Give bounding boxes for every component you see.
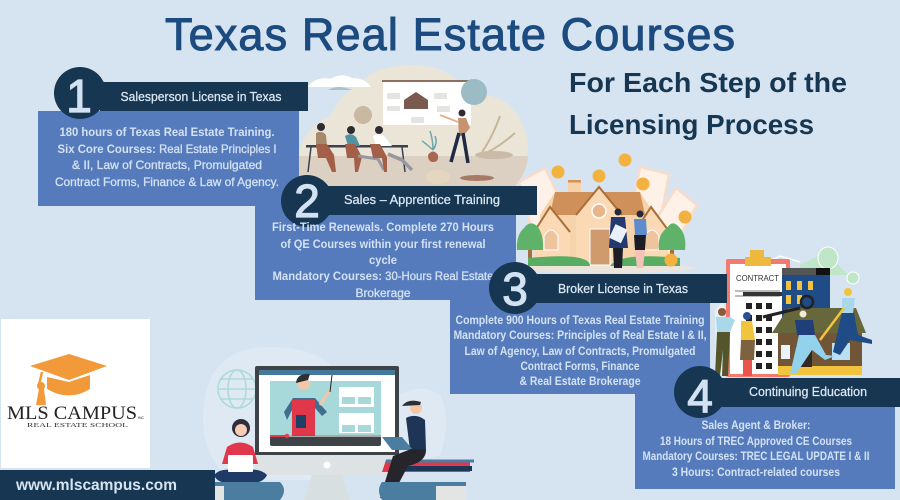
- panel 4 number badge: [674, 366, 726, 422]
- logo: MLS Campus: MLS CAMPUS: [7, 403, 137, 424]
- panel 1 text: & II, Law of Contracts, Promulgated: [72, 158, 262, 172]
- panel 3 text: Mandatory Courses: Principles of Real Estate I & II,: [454, 328, 706, 342]
- logo: MLS Campus: [1, 319, 150, 468]
- title: Texas Real Estate Courses: [165, 9, 735, 60]
- illustration: contract, keys and house: CONTRACT: [736, 273, 779, 283]
- website footer bar: www.mlscampus.com: [15, 477, 177, 494]
- panel 4: continuing education: [635, 366, 900, 489]
- subtitle: [569, 67, 847, 140]
- panel 3 header bar: [515, 274, 727, 303]
- panel 2 number badge: [281, 175, 333, 227]
- icon: graduation cap: [30, 354, 107, 405]
- panel 4 body: [635, 394, 895, 489]
- panel 4 text: 3 Hours: Contract-related courses: [672, 465, 840, 479]
- subtitle: For Each Step of the: [569, 67, 847, 98]
- panel 1 number badge: [54, 67, 106, 122]
- panel 2 text: Mandatory Courses: 30-Hours Real Estate: [272, 269, 494, 283]
- panel 3 text: Contract Forms, Finance: [520, 359, 640, 373]
- illustration: house with coins and family: [515, 154, 697, 273]
- panel 1 text: 180 hours of Texas Real Estate Training.: [60, 125, 274, 139]
- panel 1 header bar: [100, 82, 308, 111]
- panel 3 heading: Broker License in Texas: [558, 282, 688, 296]
- subtitle: Licensing Process: [569, 109, 814, 140]
- panel 1 body: [38, 111, 299, 206]
- panel 3: broker license: [450, 262, 727, 394]
- panel 4 header bar: [700, 378, 900, 407]
- panel 2 header bar: [307, 186, 537, 215]
- panel 3 number badge: 3: [502, 263, 528, 315]
- panel 3 text: Law of Agency, Law of Contracts, Promulgated: [464, 344, 696, 358]
- panel 3 body: [450, 300, 710, 394]
- illustration: meeting room presentation: [299, 65, 528, 186]
- illustration: contract, keys and house: [715, 247, 872, 377]
- panel 1 number badge: 1: [66, 70, 92, 122]
- panel 1 text: Six Core Courses: Real Estate Principles I: [58, 142, 276, 156]
- panel 3 text: & Real Estate Brokerage: [520, 374, 641, 388]
- panel 2: sales apprentice training: [255, 175, 537, 300]
- panel 2 number badge: 2: [294, 175, 320, 227]
- logo: MLS Campus: INC: [138, 416, 144, 420]
- panel 2 body: [255, 205, 516, 300]
- website footer bar: [0, 470, 215, 500]
- panel 1 heading: Salesperson License in Texas: [120, 90, 282, 104]
- panel 1: salesperson license: [38, 67, 308, 206]
- panel 3 text: Complete 900 Hours of Texas Real Estate Training: [456, 313, 704, 327]
- logo: MLS Campus: REAL ESTATE SCHOOL: [27, 422, 128, 429]
- panel 2 text: Brokerage: [356, 286, 411, 300]
- panel 4 text: 18 Hours of TREC Approved CE Courses: [660, 434, 852, 448]
- panel 2 text: First-Time Renewals. Complete 270 Hours: [272, 220, 494, 234]
- panel 4 text: Sales Agent & Broker:: [702, 418, 810, 432]
- panel 2 text: [272, 220, 494, 300]
- panel 1 text: [55, 125, 279, 189]
- panel 4 number badge: 4: [687, 370, 713, 422]
- panel 1 text: Contract Forms, Finance & Law of Agency.: [55, 175, 279, 189]
- panel 4 text: [642, 418, 870, 479]
- panel 3 number badge: [489, 262, 541, 315]
- panel 4 heading: Continuing Education: [749, 385, 867, 399]
- panel 2 text: cycle: [369, 253, 397, 267]
- panel 2 heading: Sales – Apprentice Training: [344, 193, 500, 207]
- panel 3 text: [454, 313, 706, 388]
- illustration: online class on computer: [194, 347, 474, 500]
- panel 2 text: of QE Courses within your first renewal: [280, 237, 486, 251]
